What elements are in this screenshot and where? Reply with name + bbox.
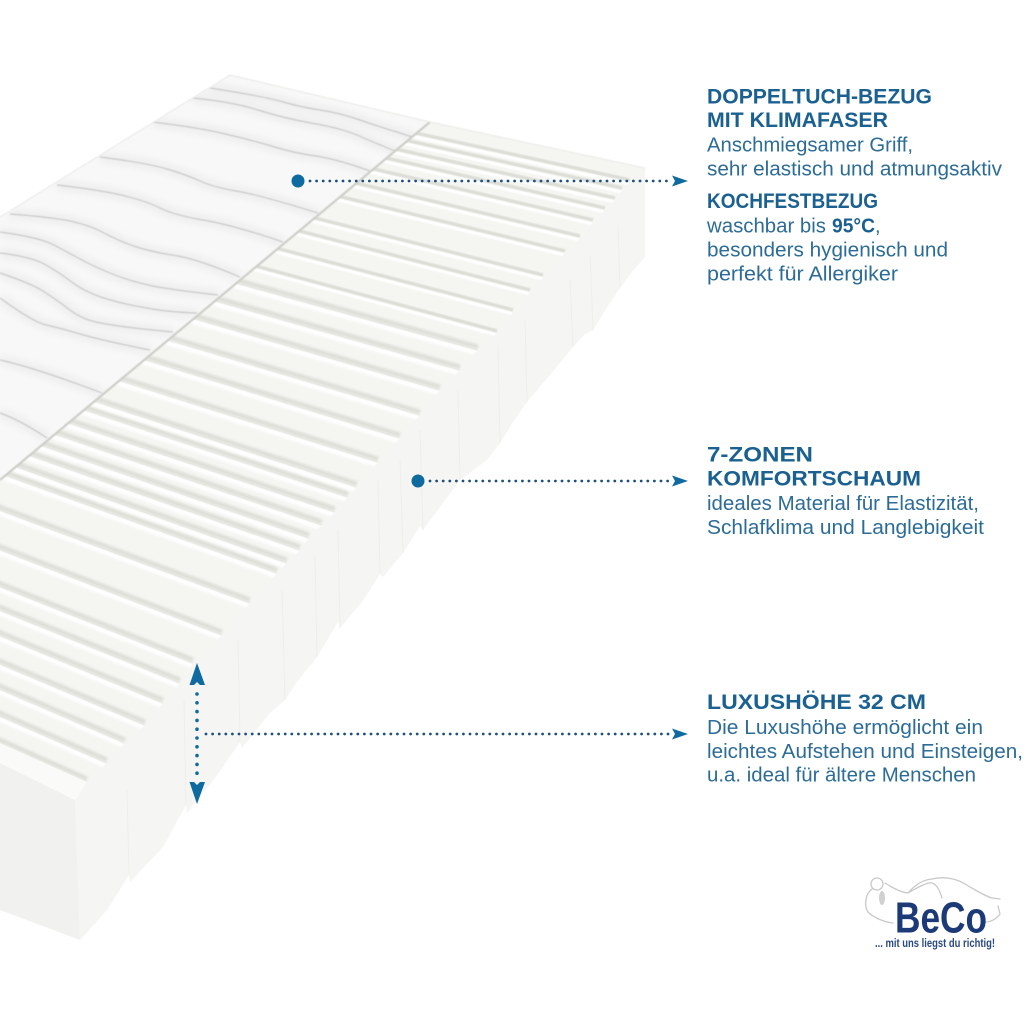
logo wordmark: BeCo — [895, 894, 987, 943]
text block: Luxushöhe: LUXUSHÖHE 32 CM — [707, 691, 926, 714]
text block: 7-Zonen Komfortschaum: Schlafklima und Langlebigkeit — [707, 517, 984, 539]
text block: Kochfestbezug: perfekt für Allergiker — [707, 264, 898, 286]
logo: BeCo bear — [866, 878, 1000, 950]
callout pointer: cover — [292, 174, 688, 188]
mattress side face — [75, 168, 645, 940]
text block: Doppeltuch-Bezug: MIT KLIMAFASER — [707, 109, 888, 132]
text block: 7-Zonen Komfortschaum: 7-ZONEN — [707, 444, 813, 467]
icon: sleeping bear outline — [866, 878, 1000, 923]
text block: Kochfestbezug — [706, 190, 948, 286]
callout pointer: foam — [412, 474, 688, 488]
text block: Doppeltuch-Bezug: sehr elastisch und atmungsaktiv — [707, 159, 1002, 181]
height measure arrow — [190, 663, 688, 804]
cover edge seam — [0, 122, 430, 480]
text block: Kochfestbezug: KOCHFESTBEZUG — [707, 190, 878, 213]
text block: Luxushöhe: Die Luxushöhe ermöglicht ein — [707, 717, 983, 739]
text block: Luxushöhe: u.a. ideal für ältere Menschen — [707, 765, 976, 787]
text block: Luxushöhe — [707, 691, 1023, 787]
text block: Doppeltuch-Bezug: Anschmiegsamer Griff, — [707, 135, 913, 157]
foam top with 7-zone ribs — [0, 123, 644, 782]
text block: Kochfestbezug: besonders hygienisch und — [707, 240, 948, 262]
mattress front face — [0, 743, 87, 940]
text block: Kochfestbezug: , — [875, 216, 881, 238]
text block: Kochfestbezug: 95°C — [832, 216, 875, 238]
quilted cover with wave seams — [0, 80, 417, 475]
mattress outer edge lines — [0, 75, 645, 217]
text block: Doppeltuch-Bezug — [707, 86, 1002, 181]
text block: Kochfestbezug: waschbar bis — [706, 216, 826, 238]
text block: 7-Zonen Komfortschaum: KOMFORTSCHAUM — [707, 468, 921, 491]
logo tagline: ... mit uns liegst du richtig! — [875, 938, 995, 950]
text block: Luxushöhe: leichtes Aufstehen und Einsteigen, — [707, 741, 1023, 763]
text block: 7-Zonen Komfortschaum — [707, 444, 984, 539]
text block: 7-Zonen Komfortschaum: ideales Material für Elastizität, — [707, 493, 979, 515]
text block: Doppeltuch-Bezug: DOPPELTUCH-BEZUG — [707, 86, 932, 108]
mattress illustration — [0, 66, 660, 940]
